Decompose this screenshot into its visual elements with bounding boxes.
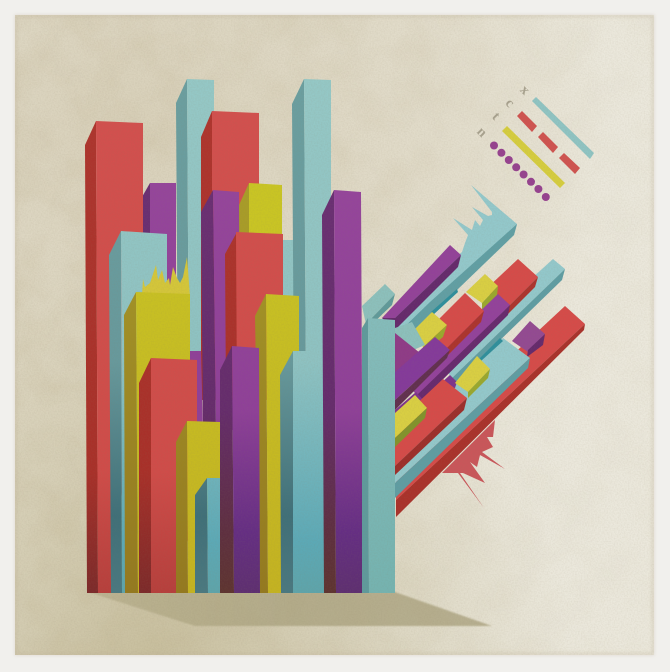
yellow spiky bar xyxy=(124,257,190,593)
diagonal purple top bar xyxy=(382,245,461,330)
legend labels: t xyxy=(489,110,503,124)
legend labels xyxy=(473,83,532,141)
legend xyxy=(473,83,594,201)
purple front bar xyxy=(220,346,260,593)
legend labels: n xyxy=(473,124,490,141)
yellow back block xyxy=(239,183,282,260)
red spikes xyxy=(442,420,505,508)
red back bar xyxy=(201,111,259,400)
vertical bars group xyxy=(85,79,395,593)
legend red dashes xyxy=(517,111,580,174)
diagonal teal spiky bar xyxy=(382,185,517,349)
teal tall bar B xyxy=(292,79,331,400)
diagonal teal front bar xyxy=(395,338,530,498)
diagonal red back bar xyxy=(485,259,538,314)
teal front bar xyxy=(280,351,331,593)
teal right bar xyxy=(362,318,395,593)
diagonal teal back bar xyxy=(440,259,565,387)
purple back bar xyxy=(138,183,176,300)
legend teal line xyxy=(532,97,594,159)
purple block on red xyxy=(512,321,545,357)
purple filler under yellow block xyxy=(395,392,428,432)
diagonal bars group xyxy=(362,185,585,517)
legend labels: c xyxy=(502,96,517,111)
yellow block on red bar xyxy=(466,274,498,310)
small teal patch xyxy=(395,322,425,358)
teal back bar short xyxy=(283,240,303,400)
teal small bar xyxy=(195,478,221,593)
diagonal purple mid bar xyxy=(410,294,510,402)
legend yellow line xyxy=(502,126,565,188)
diagonal red mid bar xyxy=(420,293,484,356)
yellow block mid xyxy=(411,312,447,354)
ground shadow xyxy=(88,592,492,626)
small purple sliver xyxy=(420,375,457,408)
red centre bar xyxy=(225,232,283,400)
yellow block front xyxy=(455,356,490,398)
teal tall bar A xyxy=(176,79,214,400)
small purple stub xyxy=(178,351,203,430)
yellow small bar xyxy=(176,421,221,593)
red tall bar xyxy=(85,121,143,593)
red front bar xyxy=(139,358,197,593)
legend labels: x xyxy=(517,83,532,98)
yellow right bar xyxy=(255,294,299,593)
diagonal red mid-front bar xyxy=(395,379,467,475)
yellow block bottom xyxy=(395,395,427,447)
purple cluster xyxy=(395,333,450,410)
teal left bar xyxy=(109,231,167,593)
diagonal teal small left xyxy=(362,284,395,328)
purple right bar xyxy=(322,190,363,593)
legend purple dots xyxy=(490,142,550,201)
diagonal red front bar (bottom) xyxy=(396,306,585,517)
purple centre bar xyxy=(201,190,240,430)
